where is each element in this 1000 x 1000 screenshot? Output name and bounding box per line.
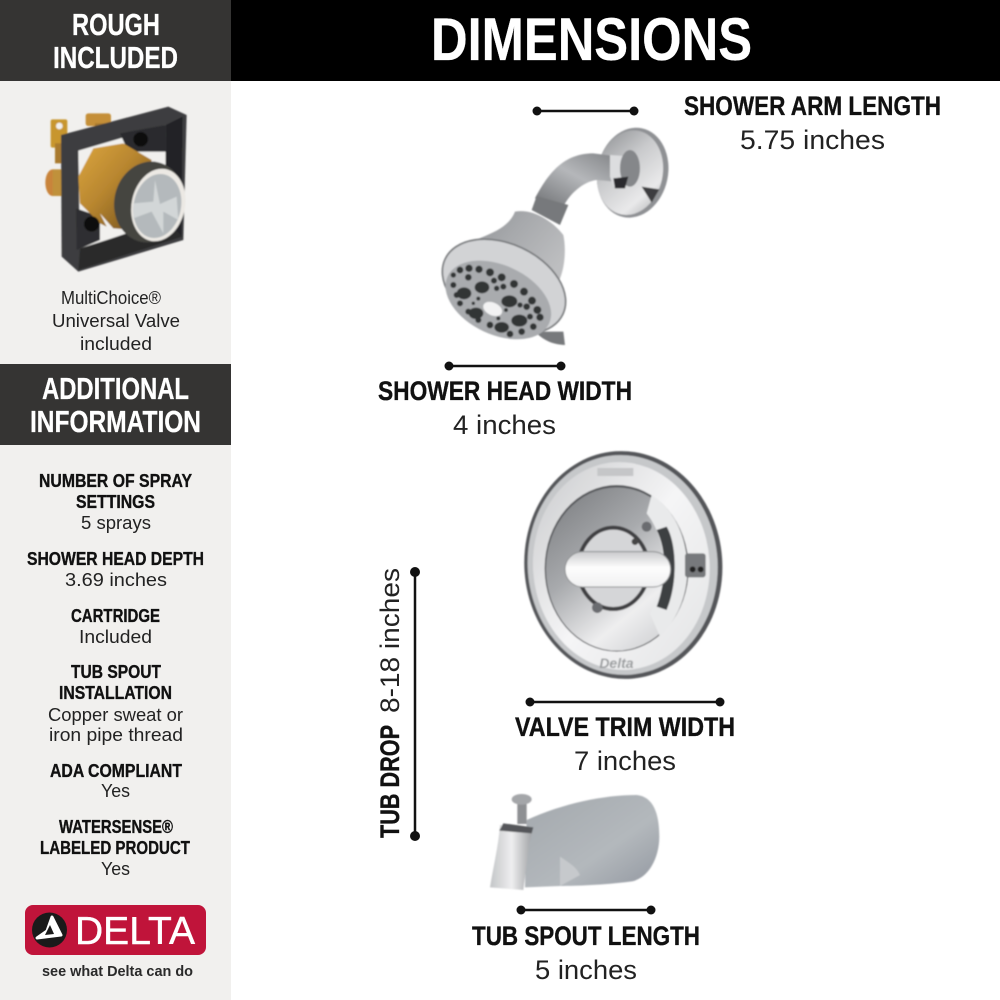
spec: watersense labeled product: Yes [101, 859, 130, 879]
spec: watersense labeled product: WATERSENSE® [59, 817, 173, 837]
image: tub spout [490, 794, 659, 890]
spec: number of spray settings: NUMBER OF SPRAY [39, 471, 192, 491]
dimension: tub drop: 8-18 inches [375, 568, 405, 713]
heading: additional information: ADDITIONAL [42, 371, 189, 406]
heading: rough included [0, 0, 231, 81]
text: valve caption [52, 288, 180, 354]
spec: tub spout installation: iron pipe thread [49, 725, 183, 745]
spec: tub spout installation: TUB SPOUT [71, 662, 161, 682]
spec: ada compliant: Yes [101, 781, 130, 801]
spec: ada compliant: ADA COMPLIANT [50, 761, 182, 781]
dimension: shower head width [378, 362, 632, 440]
header bar: dimensions [231, 0, 1000, 81]
text: valve caption: MultiChoice® [61, 288, 161, 308]
dimension: shower head width: 4 inches [453, 410, 556, 440]
spec: cartridge: Included [79, 627, 152, 647]
dimension: tub drop [375, 567, 420, 841]
spec: watersense labeled product [40, 817, 190, 879]
logo: delta: see what Delta can do [42, 963, 193, 980]
spec: number of spray settings [39, 471, 192, 533]
panel: left sidebar [0, 0, 231, 1000]
heading: additional information [0, 364, 231, 445]
dimension: valve trim width: VALVE TRIM WIDTH [515, 712, 735, 742]
dimension: tub spout length [472, 906, 700, 985]
spec: shower head depth: SHOWER HEAD DEPTH [27, 549, 204, 569]
heading: additional information: INFORMATION [30, 404, 201, 439]
spec: shower head depth: 3.69 inches [65, 570, 167, 590]
spec: cartridge [71, 606, 160, 647]
image: valve trim [517, 444, 730, 686]
dimension: shower arm length: 5.75 inches [740, 125, 885, 155]
dimension: tub drop: TUB DROP [375, 725, 405, 838]
image: universal valve [45, 107, 192, 272]
heading: rough included: ROUGH [72, 7, 160, 42]
spec: tub spout installation [48, 662, 183, 745]
spec: tub spout installation: Copper sweat or [48, 705, 183, 725]
image: valve trim: Delta [599, 655, 634, 671]
spec: tub spout installation: INSTALLATION [59, 683, 172, 703]
dimension: shower head width: SHOWER HEAD WIDTH [378, 376, 632, 406]
dimension: valve trim width [515, 698, 735, 776]
spec: shower head depth [27, 549, 204, 590]
logo: delta: DELTA [75, 910, 195, 953]
dimension: shower arm length: SHOWER ARM LENGTH [684, 91, 941, 121]
spec: ada compliant [50, 761, 182, 801]
spec: number of spray settings: SETTINGS [76, 492, 155, 512]
text: valve caption: included [80, 334, 152, 354]
spec: watersense labeled product: LABELED PRODUCT [40, 838, 190, 858]
dimension: valve trim width: 7 inches [574, 746, 676, 776]
dimension: shower arm length [532, 91, 941, 155]
image: shower head and arm [427, 121, 677, 355]
title: DIMENSIONS [431, 6, 752, 73]
logo: delta [25, 905, 206, 980]
dimension: tub spout length: TUB SPOUT LENGTH [472, 921, 700, 951]
heading: rough included: INCLUDED [53, 40, 178, 75]
dimension: tub spout length: 5 inches [535, 955, 637, 985]
spec: cartridge: CARTRIDGE [71, 606, 160, 626]
text: valve caption: Universal Valve [52, 311, 180, 331]
spec: number of spray settings: 5 sprays [81, 513, 151, 533]
